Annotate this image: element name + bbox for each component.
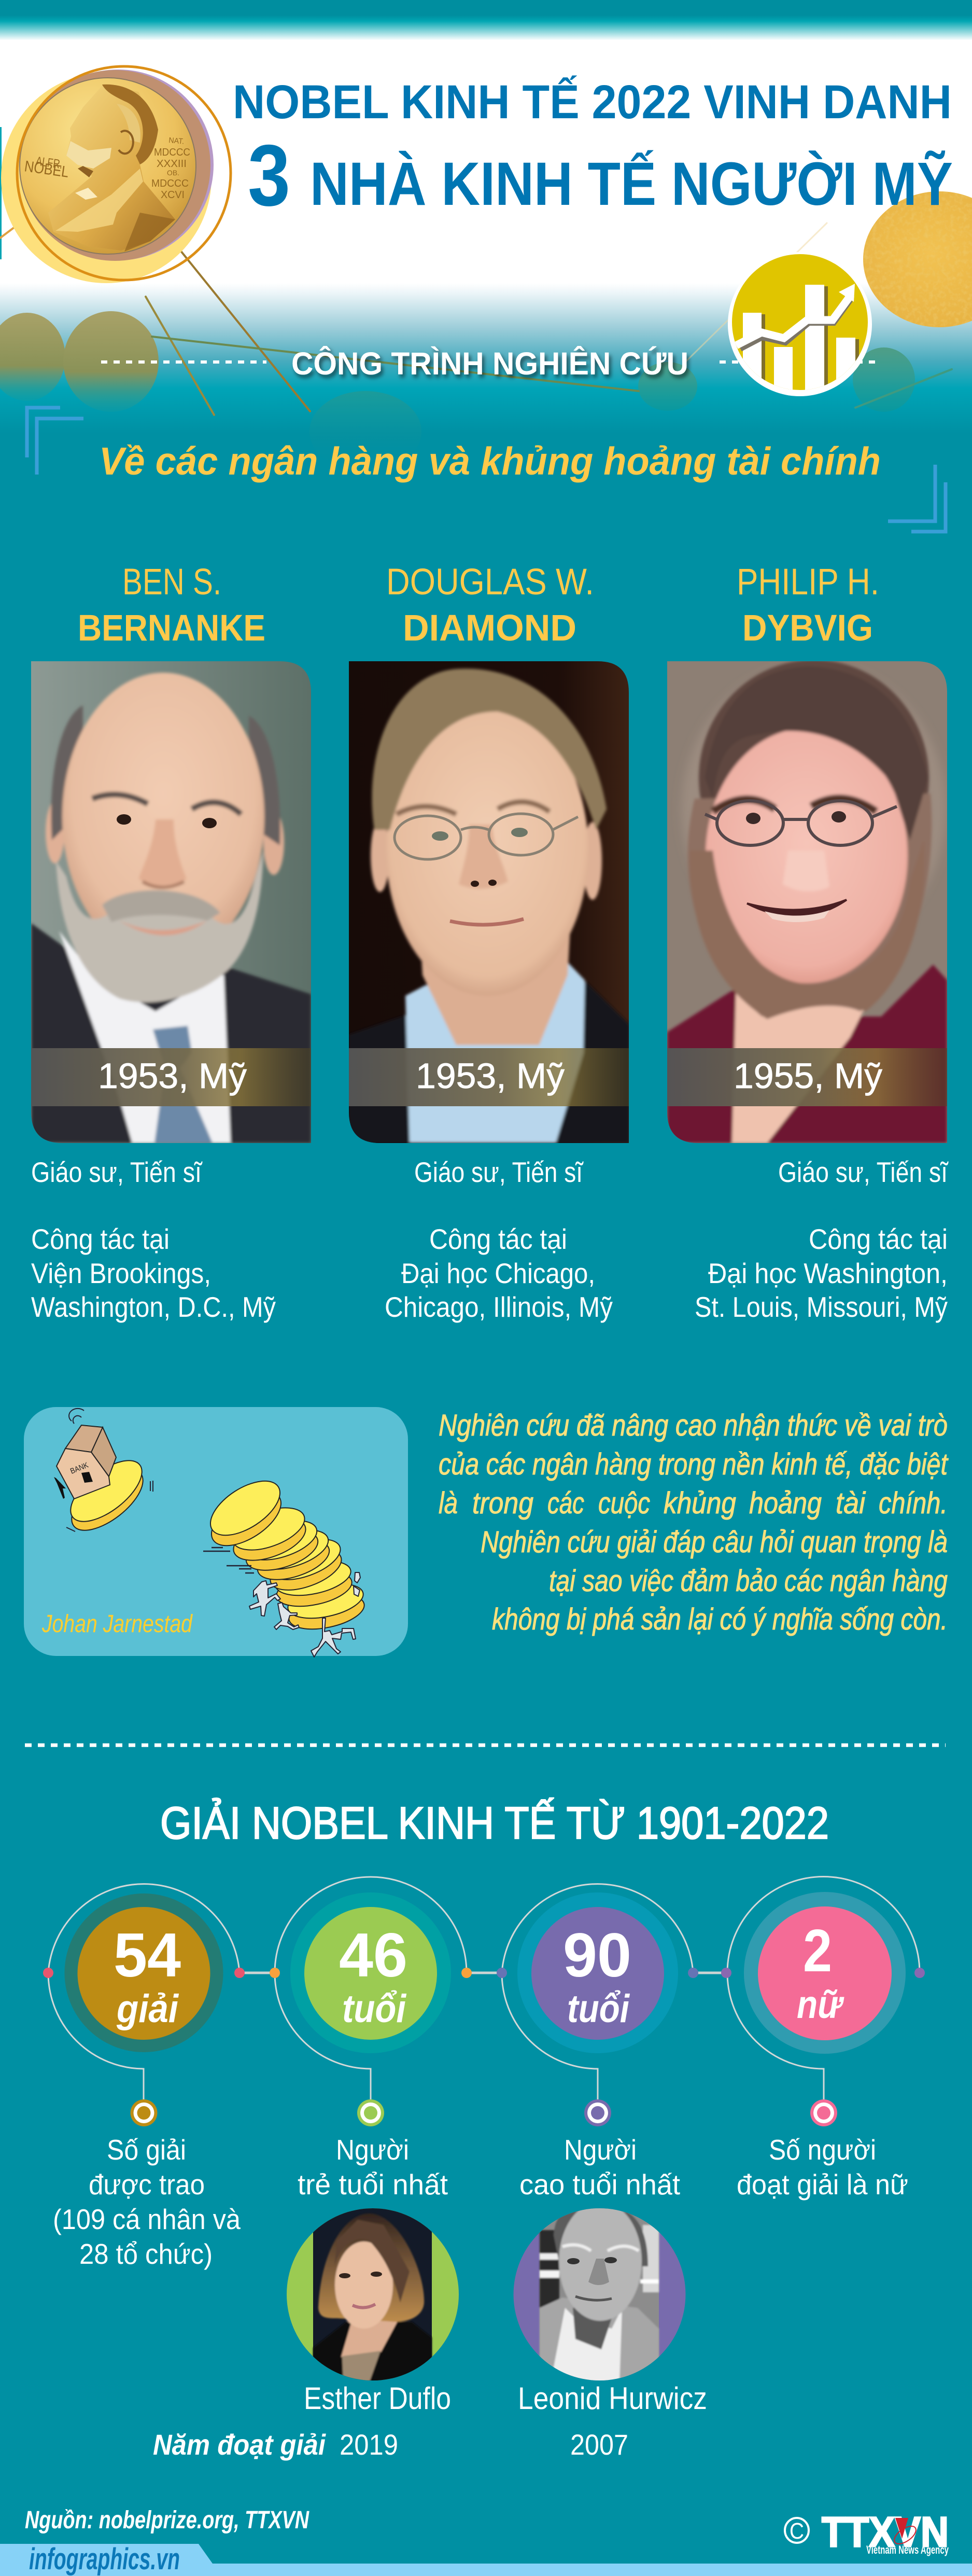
laureate details column 1	[31, 1156, 276, 1323]
stat: 46 years: 46	[339, 1920, 407, 1990]
connector lines	[240, 1972, 726, 1974]
icon: Nobel medal: XXXIII	[157, 158, 187, 170]
stat: 46 years: tuổi	[342, 1987, 407, 2031]
title: 3	[248, 127, 290, 224]
portrait: Leonid Hurwicz	[513, 2202, 685, 2383]
source note: Nguồn: nobelprize.org, TTXVN	[25, 2507, 309, 2534]
heading: Nobel statistics: GIẢI NOBEL KINH TẾ TỪ 1901-2022	[160, 1798, 829, 1848]
panel: Dybvig photo	[667, 660, 947, 1144]
icon: Nobel medal: OB.	[167, 169, 179, 177]
laureate names	[78, 562, 879, 649]
icon: Nobel medal: XCVI	[161, 189, 185, 201]
portrait: Esther Duflo	[287, 2204, 459, 2383]
laureate details column 1: Washington, D.C., Mỹ	[31, 1291, 276, 1323]
stat captions: Người	[564, 2134, 637, 2166]
names and award years: Năm đoạt giải	[153, 2428, 326, 2461]
logo: TTXVN copyright: TTXVN	[822, 2509, 949, 2556]
credit: Johan Jarnestad	[41, 1610, 193, 1638]
laureate details column 3: Công tác tại	[809, 1223, 948, 1255]
text block: research summary: là	[439, 1486, 458, 1520]
stat captions: đoạt giải là nữ	[737, 2168, 908, 2201]
panel: cartoon of bank on falling coins	[24, 1407, 408, 1657]
laureate details column 1: Viện Brookings,	[31, 1257, 211, 1289]
text block: research summary: khủng	[664, 1486, 736, 1520]
icon: Nobel medal: MDCCC	[154, 147, 190, 158]
laureate details column 2: Công tác tại	[429, 1223, 567, 1255]
names and award years: 2019	[340, 2428, 398, 2461]
text block: research summary: trong	[472, 1486, 533, 1520]
laureate details column 2	[385, 1156, 613, 1323]
laureate details column 2: Chicago, Illinois, Mỹ	[385, 1291, 613, 1323]
stat: 54 prizes: 54	[114, 1920, 181, 1990]
icon: Nobel medal: MDCCC	[151, 178, 189, 189]
stat captions: cao tuổi nhất	[519, 2168, 680, 2201]
laureate details column 3	[695, 1156, 949, 1323]
icon: bank on coin: BANK	[69, 1460, 90, 1476]
laureate details column 2: Đại học Chicago,	[401, 1257, 595, 1289]
icon: bank on coin	[54, 1409, 153, 1541]
stat captions: 28 tổ chức)	[79, 2238, 213, 2270]
footer bar with site tab	[0, 2542, 972, 2576]
title	[233, 75, 953, 224]
corner bracket bottom-right	[888, 465, 946, 532]
laureate names: DOUGLAS W.	[386, 562, 594, 603]
stat captions: Người	[336, 2134, 409, 2166]
decorative gold and olive discs	[0, 191, 972, 472]
laureate details column 2: Giáo sư, Tiến sĩ	[414, 1156, 584, 1188]
footer bar with site tab: infographics.vn	[29, 2542, 180, 2576]
stat: 2 women	[721, 1876, 925, 2126]
panel: Diamond photo	[349, 661, 629, 1144]
icon: Nobel medal: NAT.	[168, 136, 185, 146]
names and award years: Esther Duflo	[304, 2381, 451, 2416]
text block: research summary: tài	[836, 1486, 866, 1520]
stat captions: Số giải	[107, 2134, 186, 2166]
icon: rising bar chart	[728, 252, 872, 404]
stat captions: được trao	[89, 2168, 205, 2201]
stat captions: (109 cá nhân và	[53, 2203, 241, 2235]
section heading with dotted rule: CÔNG TRÌNH NGHIÊN CỨU	[291, 346, 688, 381]
logo: TTXVN copyright: C	[790, 2518, 804, 2544]
stat: 54 prizes: giải	[116, 1987, 179, 2031]
laureate names: BERNANKE	[78, 608, 265, 649]
stat: 54 prizes	[43, 1884, 245, 2126]
laureate names: DYBVIG	[742, 608, 873, 649]
stat: 90 years: 90	[563, 1920, 631, 1990]
icon: toppling coin stack	[202, 1470, 368, 1635]
laureate names: BEN S.	[122, 562, 221, 603]
stat captions: Số người	[769, 2134, 876, 2166]
text block: research summary: cuộc	[598, 1486, 650, 1520]
stat captions: trẻ tuổi nhất	[298, 2168, 448, 2201]
panel: Bernanke photo	[31, 661, 311, 1144]
icon: Nobel medal: NOBEL	[23, 158, 70, 181]
stat: 90 years: tuổi	[567, 1987, 630, 2031]
icon: Nobel medal	[1, 66, 231, 283]
text block: research summary	[439, 1409, 949, 1636]
subtitle: Về các ngân hàng và khủng hoảng tài chính	[99, 439, 881, 483]
divider	[25, 1744, 946, 1747]
year bands: 1955, Mỹ	[734, 1056, 882, 1096]
stat: 2 women: 2	[803, 1917, 832, 1984]
laureate details column 1: Công tác tại	[31, 1223, 170, 1255]
icon: running figures	[249, 1572, 360, 1657]
laureate details column 1: Giáo sư, Tiến sĩ	[31, 1156, 203, 1188]
text block: research summary: chính.	[879, 1486, 948, 1520]
names and award years	[153, 2381, 707, 2461]
laureate details column 3: Đại học Washington,	[708, 1257, 948, 1289]
names and award years: Leonid Hurwicz	[518, 2381, 707, 2416]
laureate names: PHILIP H.	[737, 562, 879, 603]
stat captions	[53, 2134, 908, 2270]
names and award years: 2007	[570, 2428, 628, 2461]
text block: research summary: các	[547, 1486, 584, 1520]
stat: 90 years	[497, 1884, 698, 2126]
laureate names: DIAMOND	[403, 608, 576, 649]
year bands	[31, 1048, 947, 1106]
thin gold lines	[0, 215, 952, 415]
corner bracket top-left	[27, 408, 83, 475]
icon: Nobel medal: ALFR.	[35, 154, 63, 172]
stat: 2 women: nữ	[797, 1983, 844, 2027]
year bands: 1953, Mỹ	[416, 1056, 565, 1096]
year bands: 1953, Mỹ	[98, 1056, 247, 1096]
stat: 46 years	[270, 1877, 472, 2126]
text block: research summary: hoảng	[749, 1486, 822, 1520]
